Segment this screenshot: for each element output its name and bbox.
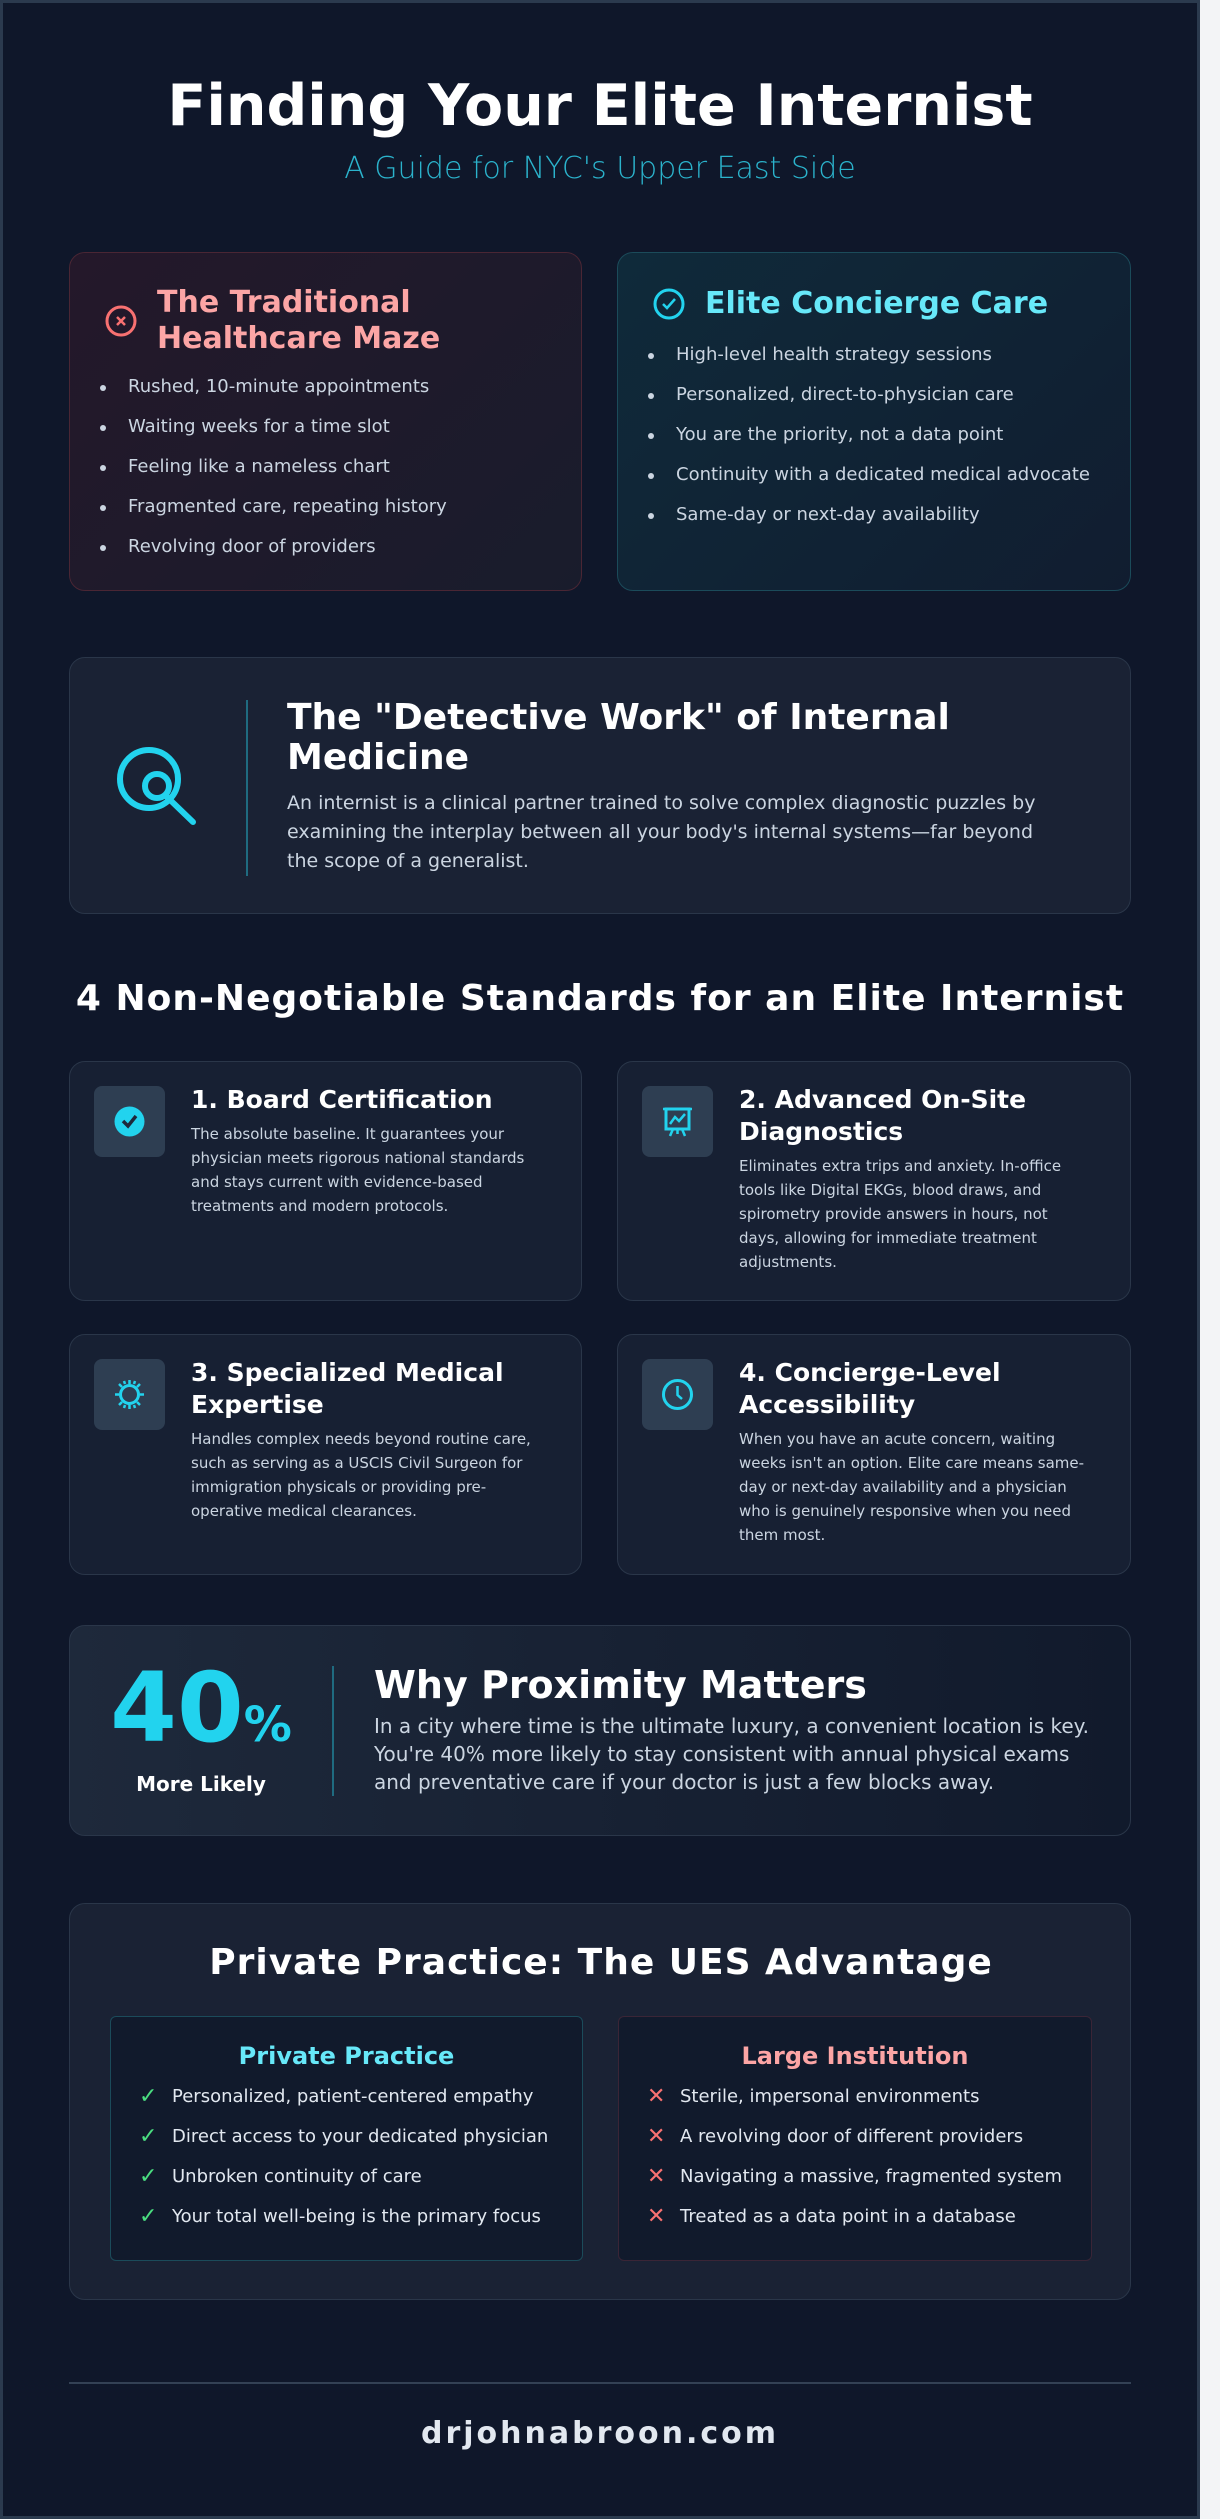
panel: detective work xyxy=(69,657,1131,914)
subpanel: private practice: Unbroken continuity of care xyxy=(172,2166,422,2187)
panel: elite concierge care xyxy=(617,252,1131,591)
subpanel: private practice: Direct access to your dedicated physician xyxy=(172,2126,548,2147)
subpanel: large institution: ✕ xyxy=(647,2124,665,2149)
heading: The Traditional xyxy=(157,285,411,320)
bullet list xyxy=(648,344,1090,525)
stat: 40%: More Likely xyxy=(136,1772,266,1796)
subpanel: large institution xyxy=(618,2016,1092,2261)
subpanel: private practice: ✓ xyxy=(139,2124,157,2149)
subpanel: large institution: ✕ xyxy=(647,2204,665,2229)
subpanel: private practice: Personalized, patient-centered empathy xyxy=(172,2086,533,2107)
subpanel: private practice: Your total well-being is the primary focus xyxy=(172,2206,541,2227)
card: board certification: The absolute baseline. It guarantees your physician meets rigorous national standards and stays current with evidence-based treatments and modern protocols. xyxy=(191,1125,524,1215)
card: diagnostics xyxy=(617,1061,1131,1301)
heading and text xyxy=(374,1663,1089,1794)
bullet list: Waiting weeks for a time slot xyxy=(128,416,390,437)
heading and text: An internist is a clinical partner trained to solve complex diagnostic puzzles by examining the interplay between all your body's internal systems—far beyond xyxy=(287,792,1035,843)
heading and text xyxy=(287,697,1035,872)
heading and text: the scope of a generalist. xyxy=(287,850,529,872)
heading and text: The "Detective Work" of Internal Medicine xyxy=(287,697,950,778)
footer: drjohnabroon.com xyxy=(421,2416,779,2451)
card: specialized expertise xyxy=(69,1334,582,1575)
subtitle: A Guide for NYC's Upper East Side xyxy=(344,151,856,186)
bullet list: Rushed, 10-minute appointments xyxy=(128,376,429,397)
bullet list: You are the priority, not a data point xyxy=(676,424,1003,445)
card: board certification xyxy=(69,1061,582,1301)
subpanel: large institution: Sterile, impersonal environments xyxy=(680,2086,979,2107)
subpanel: large institution: Treated as a data point in a database xyxy=(680,2206,1016,2227)
card: board certification: 1. Board Certification xyxy=(191,1085,492,1114)
subpanel: large institution: Navigating a massive, fragmented system xyxy=(680,2166,1062,2187)
icon: x circle xyxy=(106,306,136,336)
card: diagnostics: Eliminates extra trips and anxiety. In-office tools like Digital EKGs, blood draws, and spirometry provide answers in hours, not days, allowing for immediate treatment adjustments. xyxy=(739,1157,1061,1271)
bullet list xyxy=(100,376,447,557)
subpanel: private practice: ✓ xyxy=(139,2204,157,2229)
icon: chart board xyxy=(642,1086,713,1157)
subpanel: private practice: ✓ xyxy=(139,2164,157,2189)
subpanel: private practice: Private Practice xyxy=(239,2042,454,2070)
bullet list: High-level health strategy sessions xyxy=(676,344,992,365)
subpanel: large institution: ✕ xyxy=(647,2164,665,2189)
heading and text: Why Proximity Matters xyxy=(374,1663,867,1707)
icon: badge check xyxy=(94,1086,165,1157)
subpanel: large institution: ✕ xyxy=(647,2084,665,2109)
icon: virus xyxy=(94,1359,165,1430)
title: Finding Your Elite Internist xyxy=(167,73,1033,139)
bullet list: Same-day or next-day availability xyxy=(676,504,980,525)
bullet list: Feeling like a nameless chart xyxy=(128,456,390,477)
bullet list: Revolving door of providers xyxy=(128,536,376,557)
bullet list: Personalized, direct-to-physician care xyxy=(676,384,1014,405)
heading: Healthcare Maze xyxy=(157,321,440,356)
card: specialized expertise: Handles complex needs beyond routine care, such as serving as a USCIS Civil Surgeon for immigration physicals or providing pre-operative medical clearances. xyxy=(191,1430,531,1520)
card: accessibility xyxy=(617,1334,1131,1575)
bullet list: Continuity with a dedicated medical advocate xyxy=(676,464,1090,485)
card: accessibility: When you have an acute concern, waiting weeks isn't an option. Elite care means same-day or next-day availability and a physician who is genuinely responsive when you need them most. xyxy=(739,1430,1084,1544)
card: specialized expertise: 3. Specialized Medical Expertise xyxy=(191,1358,504,1419)
card: accessibility: 4. Concierge-Level Accessibility xyxy=(739,1358,1001,1419)
subpanel: private practice xyxy=(110,2016,583,2261)
heading: Private Practice: The UES Advantage xyxy=(209,1942,993,1983)
heading xyxy=(157,285,440,356)
heading: Elite Concierge Care xyxy=(705,286,1048,321)
subpanel: private practice: ✓ xyxy=(139,2084,157,2109)
icon: clock xyxy=(642,1359,713,1430)
section heading: standards: 4 Non-Negotiable Standards for an Elite Internist xyxy=(76,978,1124,1019)
bullet list: Fragmented care, repeating history xyxy=(128,496,447,517)
panel: proximity xyxy=(69,1625,1131,1836)
icon: check circle xyxy=(654,288,684,320)
subpanel: large institution: A revolving door of different providers xyxy=(680,2126,1023,2147)
stat: 40%: 40% xyxy=(110,1652,292,1764)
panel: UES advantage xyxy=(69,1903,1131,2300)
subpanel: large institution: Large Institution xyxy=(742,2042,968,2070)
icon: magnifier xyxy=(117,747,196,825)
heading and text: In a city where time is the ultimate luxury, a convenient location is key. You're 40% more likely to stay consistent with annual physical exams and preventative care if your doctor is just a few blocks away. xyxy=(374,1714,1089,1794)
card: diagnostics: 2. Advanced On-Site Diagnostics xyxy=(739,1085,1026,1146)
panel: traditional healthcare maze xyxy=(69,252,582,591)
